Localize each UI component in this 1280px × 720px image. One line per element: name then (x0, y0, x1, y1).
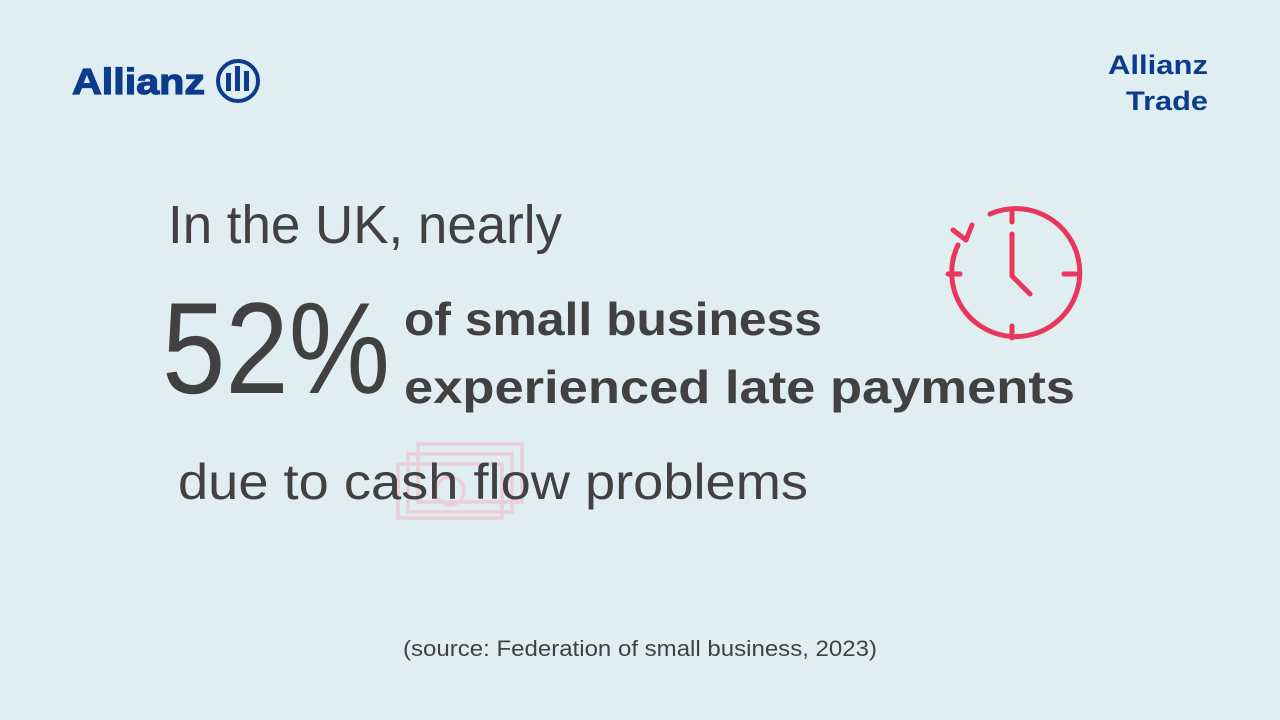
icon: money bills (398, 444, 522, 518)
logo: Allianz: Allianz (72, 61, 205, 102)
headline text: In the UK, nearly (168, 195, 562, 255)
headline text: due to cash flow problems (178, 454, 808, 510)
logo: Allianz (72, 61, 258, 102)
logo: Allianz Trade: Allianz (1108, 50, 1208, 80)
headline text (162, 195, 1075, 510)
headline text: 52% (162, 275, 390, 421)
icon: clock (948, 209, 1080, 338)
logo: Allianz Trade: Trade (1126, 86, 1208, 116)
headline text: experienced late payments (404, 361, 1075, 413)
source note: (source: Federation of small business, 2023) (403, 636, 877, 661)
logo: Allianz Trade (1108, 50, 1208, 116)
headline text: of small business (404, 293, 822, 345)
